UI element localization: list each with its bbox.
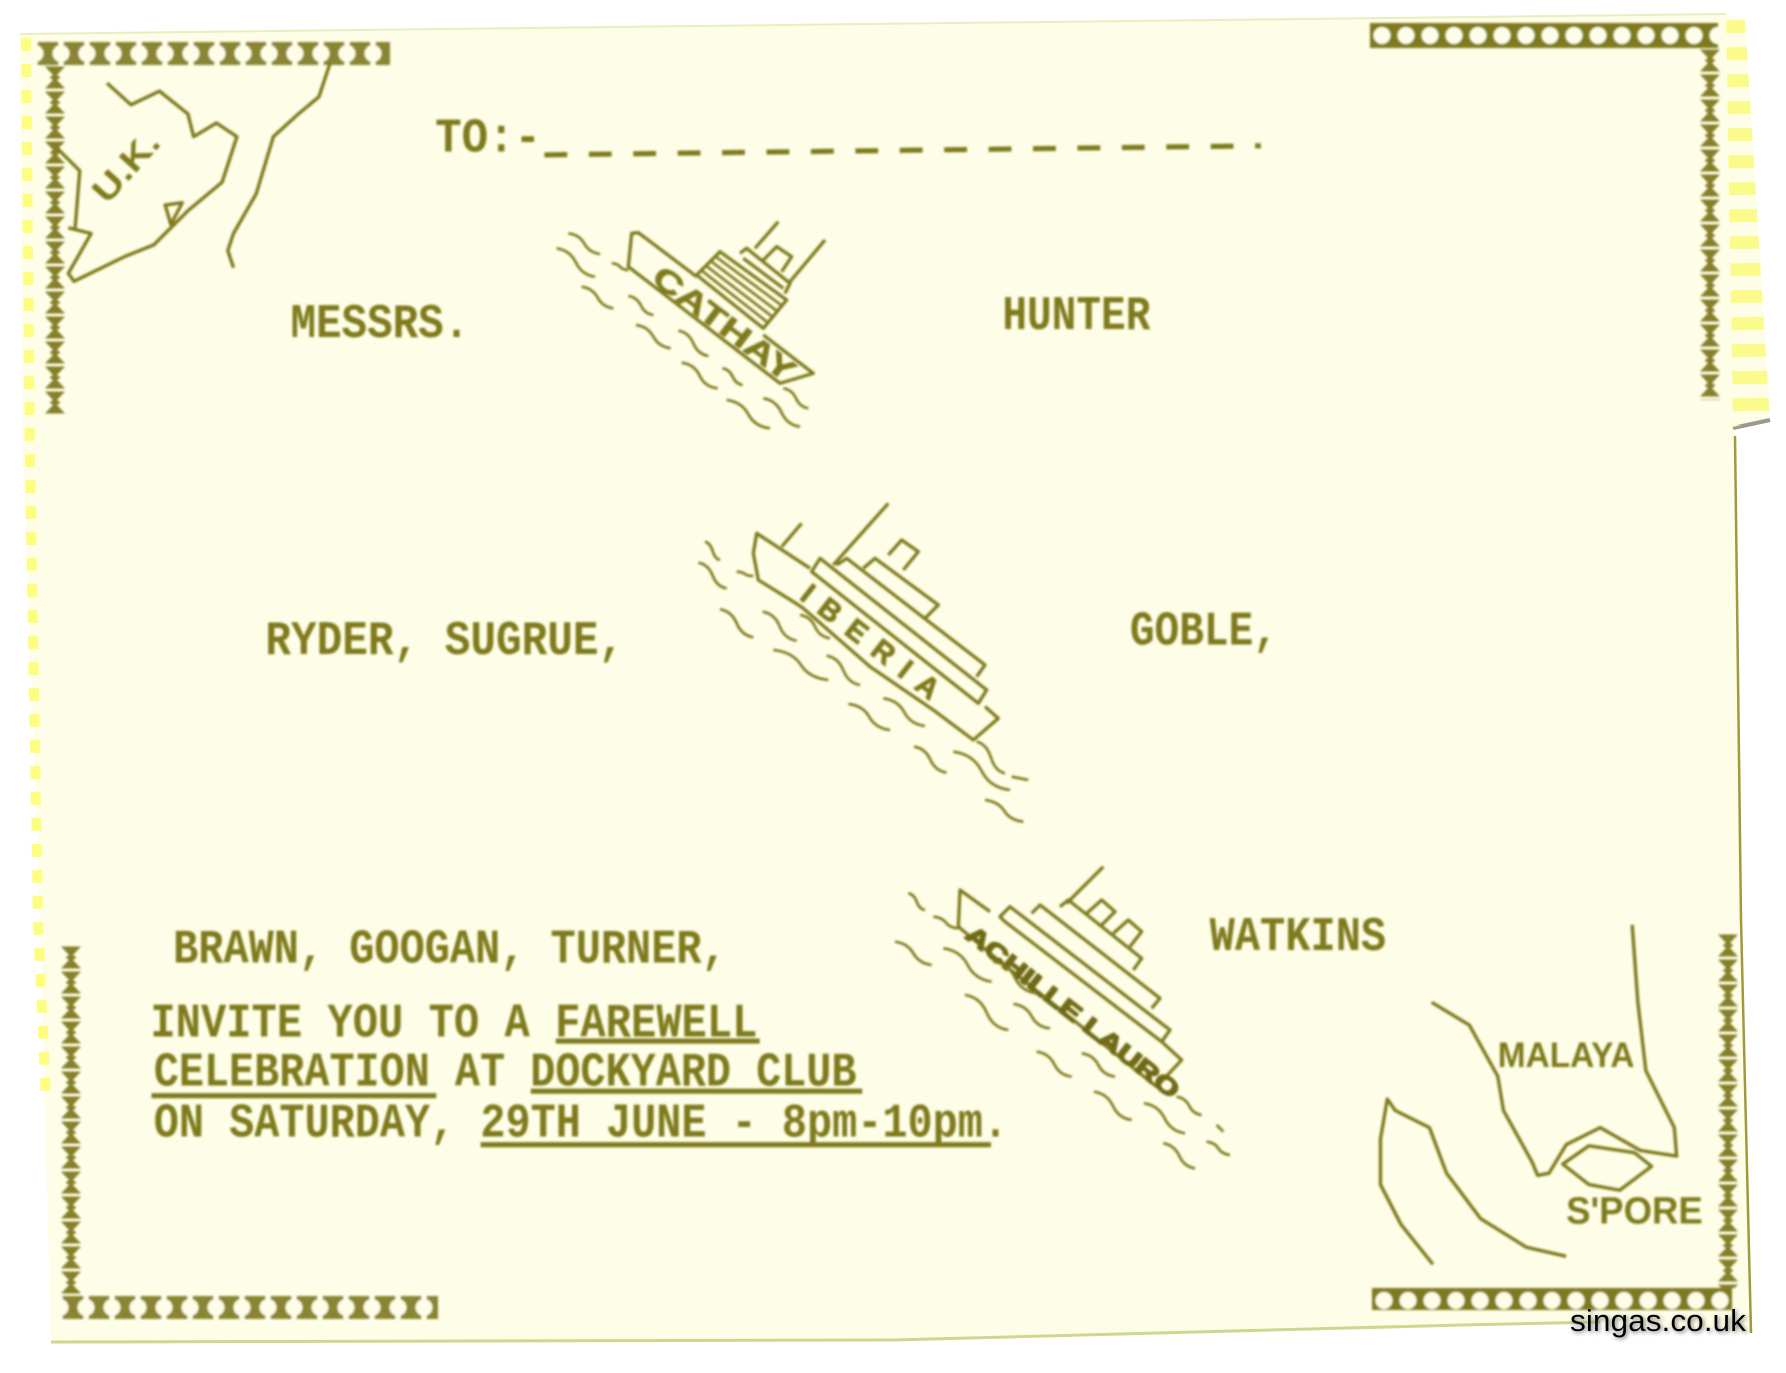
names: Ryder, Sugrue: RYDER, SUGRUE, xyxy=(265,615,624,669)
yellow stripes: left edge xyxy=(26,38,46,1100)
invitation line 1: INVITE YOU TO A FAREWELL xyxy=(150,997,757,1051)
underlines xyxy=(151,1041,991,1145)
decks xyxy=(1000,907,1170,1042)
names: Brawn, Googan, Turner: BRAWN, GOOGAN, TURNER, xyxy=(173,923,727,977)
hull xyxy=(958,890,1182,1087)
border: top right xyxy=(1370,23,1722,400)
ship name: CATHAY xyxy=(646,259,802,389)
masts xyxy=(755,222,825,282)
ship: Iberia xyxy=(698,503,1028,822)
waves xyxy=(698,542,1028,822)
waves xyxy=(895,893,1230,1168)
invitation line 3: ON SATURDAY, 29TH JUNE - 8pm-10pm. xyxy=(154,1098,1008,1152)
ship name: ACHILLE LAURO xyxy=(960,921,1184,1104)
watermark: singas.co.uk xyxy=(1570,1303,1746,1338)
funnels xyxy=(1087,900,1142,947)
name: Goble: GOBLE, xyxy=(1130,606,1278,660)
name: Watkins: WATKINS xyxy=(1210,911,1386,965)
border: bottom right xyxy=(1372,933,1740,1310)
UK label: U.K. xyxy=(85,124,168,210)
invitation line 2: CELEBRATION AT DOCKYARD CLUB xyxy=(154,1046,857,1100)
typed text xyxy=(150,112,1386,1152)
ship name: IBERIA xyxy=(794,578,946,706)
funnel xyxy=(763,247,792,272)
Singapore label: S'PORE xyxy=(1566,1189,1703,1231)
decks xyxy=(812,558,987,703)
dashed address line xyxy=(544,146,1261,155)
yellow stripes: right flap xyxy=(1745,20,1750,430)
superstructure xyxy=(697,252,787,328)
border: top left xyxy=(35,42,390,416)
ship: Achille Lauro xyxy=(895,867,1230,1168)
addressee prompt: TO:- xyxy=(435,112,541,166)
UK map xyxy=(57,63,330,281)
masts xyxy=(782,503,888,565)
name: Messrs: MESSRS. xyxy=(290,298,469,352)
name: Hunter: HUNTER xyxy=(1002,290,1151,344)
Malaya label: MALAYA xyxy=(1498,1036,1634,1075)
waves xyxy=(557,233,808,428)
hull xyxy=(753,533,998,740)
border: bottom left xyxy=(59,945,438,1319)
ship: Cathay xyxy=(557,222,825,428)
mast xyxy=(1067,867,1103,903)
funnel xyxy=(888,540,918,570)
hull xyxy=(628,233,813,383)
Malaya and Singapore map xyxy=(1380,925,1703,1264)
